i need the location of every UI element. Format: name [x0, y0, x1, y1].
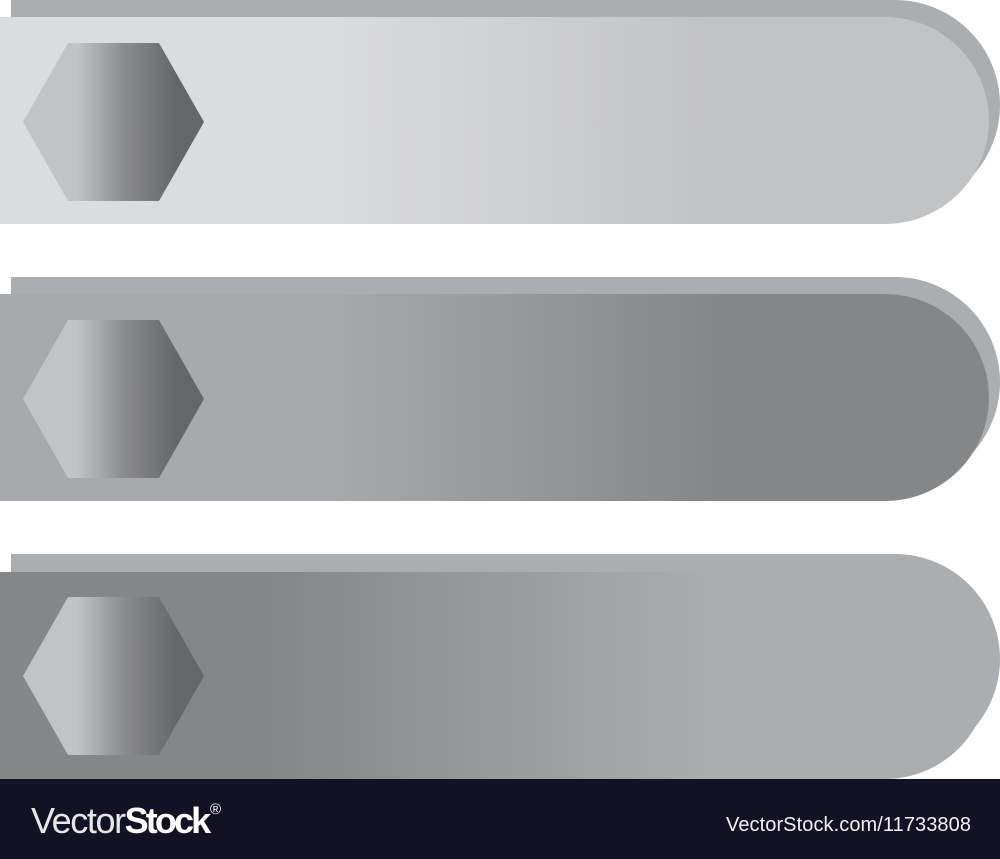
banner 3 back strip	[11, 554, 1000, 764]
banner 2 hexagon	[23, 320, 204, 478]
image id url: VectorStock.com/11733808	[726, 814, 971, 836]
banner 1	[0, 0, 1000, 224]
banner 3 front panel	[0, 572, 989, 779]
banner 2 front panel	[0, 294, 989, 501]
banner 3 hexagon	[23, 597, 204, 755]
banner 1 back strip	[11, 0, 1000, 210]
footer bar: ®	[210, 801, 221, 818]
VectorStock logo: VectorStock	[31, 800, 208, 841]
footer bar	[0, 779, 1000, 859]
banner 2 back strip	[11, 277, 1000, 487]
banner 1 hexagon	[23, 43, 204, 201]
banner 2	[0, 277, 1000, 501]
banner 1 front panel	[0, 17, 989, 224]
banner 3	[0, 554, 1000, 779]
